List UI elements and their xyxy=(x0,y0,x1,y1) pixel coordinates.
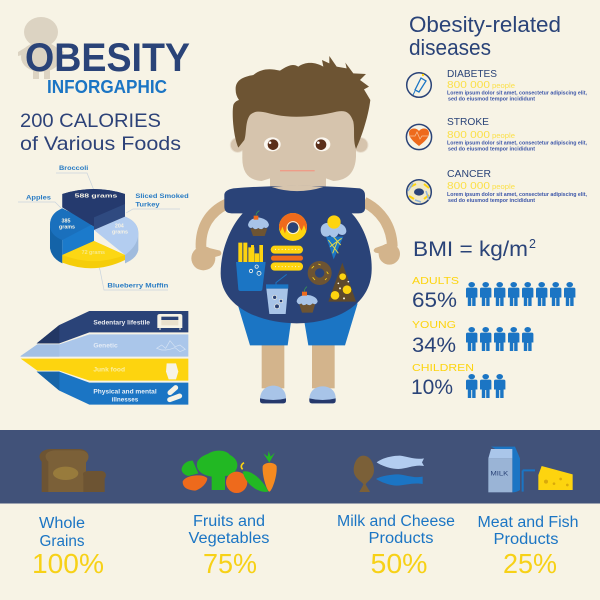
leader lines xyxy=(18,173,180,290)
arrow: genetic: Genetic xyxy=(93,344,118,350)
mouth xyxy=(280,169,315,173)
disease: diabetes: DIABETES xyxy=(447,69,497,80)
stat: children 10% xyxy=(411,362,505,399)
shirt xyxy=(221,186,372,323)
arrow: sedentary lifestyle: Sedentary lifestile xyxy=(93,321,151,327)
cucumber xyxy=(243,471,268,492)
arrow: physical and mental illnesses: Physical and mental xyxy=(93,389,157,395)
icon: milk and cheese xyxy=(488,447,573,492)
pie values and labels: 72 grams xyxy=(82,250,105,256)
arrow: sedentary lifestyle xyxy=(37,311,188,343)
disease: stroke: people xyxy=(492,133,515,140)
pie values and labels: Apples xyxy=(26,195,51,202)
label: meat and fish xyxy=(478,514,578,579)
pie values and labels: Blueberry Muffin xyxy=(107,282,168,289)
disease: diabetes: people xyxy=(492,83,515,90)
BMI formula: 2 xyxy=(529,237,536,251)
heading: obesity-related diseases: Obesity-related xyxy=(409,12,561,37)
disease: stroke: sed do eiusmod tempor incididunt xyxy=(448,146,535,152)
label: fruits and vegetables: 75% xyxy=(203,548,257,579)
label: whole grains: Whole xyxy=(39,515,85,532)
legs xyxy=(262,340,335,388)
disease: diabetes xyxy=(407,69,588,102)
heading: obesity-related diseases xyxy=(409,12,561,60)
pie values and labels: 385 xyxy=(62,219,70,225)
pie values and labels: Sliced Smoked xyxy=(135,193,189,200)
label: whole grains: Grains xyxy=(40,533,85,550)
stat: children 10%: CHILDREN xyxy=(412,362,474,374)
food: chocolate donut xyxy=(308,261,332,285)
disease: cancer: 800 000 xyxy=(447,180,490,192)
chicken leg xyxy=(354,456,374,492)
BMI formula: BMI = kg/m xyxy=(413,238,528,261)
disease: cancer xyxy=(407,169,588,204)
disease: cancer: CANCER xyxy=(447,169,491,180)
label: fruits and vegetables: Vegetables xyxy=(188,530,270,547)
arrow: physical and mental illnesses: illnesses xyxy=(112,397,139,403)
heading: calories xyxy=(20,110,181,155)
pie values and labels: Turkey xyxy=(135,202,160,209)
food: cupcake xyxy=(248,211,269,236)
arrow chart: causes of obesity xyxy=(21,311,188,405)
pie values and labels: 588 grams xyxy=(75,194,117,200)
body xyxy=(191,186,400,403)
disease: cancer: Lorem ipsum dolor sit amet, consectetur adipiscing elit, xyxy=(447,192,588,198)
slice: broccoli xyxy=(62,189,125,230)
straw xyxy=(523,470,535,492)
stat: young 34%: YOUNG xyxy=(412,319,456,331)
arrow: junk food: Junk food xyxy=(93,368,125,374)
stat: young 34% xyxy=(412,319,533,357)
broccoli xyxy=(197,451,237,490)
heading: calories: 200 CALORIES xyxy=(20,110,161,132)
arrow: junk food xyxy=(21,359,188,381)
disease: stroke xyxy=(406,117,588,152)
hair xyxy=(233,56,370,149)
food: ice cream xyxy=(321,215,346,259)
stat: adults 65% xyxy=(412,275,575,312)
disease: cancer: people xyxy=(492,184,515,191)
slice: sliced smoked turkey xyxy=(94,217,138,263)
disease: diabetes: 800 000 xyxy=(447,79,490,91)
label: whole grains xyxy=(32,515,104,579)
food: pizza slice xyxy=(328,263,356,302)
stat: adults 65%: ADULTS xyxy=(412,275,459,287)
pie chart: calories by food xyxy=(18,165,189,290)
arrow: genetic xyxy=(21,334,188,357)
shoes xyxy=(260,386,336,403)
curl xyxy=(241,463,244,469)
shorts xyxy=(238,303,358,345)
icon: fries box xyxy=(166,363,178,379)
icon: pills xyxy=(170,388,180,400)
label: whole grains: 100% xyxy=(32,548,104,579)
icon: heart xyxy=(406,124,432,150)
milk carton: MILK xyxy=(490,472,508,478)
label: fruits and vegetables: Fruits and xyxy=(193,513,265,530)
cheese xyxy=(538,466,573,490)
label: meat and fish: 25% xyxy=(503,548,557,579)
pie values and labels: 204 xyxy=(115,223,124,229)
food: french fries xyxy=(236,243,266,291)
arms xyxy=(201,202,392,248)
apple xyxy=(183,475,207,491)
icon: bread xyxy=(40,449,106,492)
heading: obesity-related diseases: diseases xyxy=(409,35,491,60)
slice: blueberry muffin xyxy=(62,241,125,268)
label: milk and cheese: Milk and Cheese xyxy=(337,513,455,530)
pie values and labels: Broccoli xyxy=(59,165,88,172)
hands xyxy=(191,243,400,270)
heading: calories: of Various Foods xyxy=(20,133,181,155)
icon: cell xyxy=(407,180,431,204)
fish top xyxy=(377,456,424,469)
label: meat and fish: Meat and Fish xyxy=(478,514,578,531)
fish bottom xyxy=(376,474,423,486)
disease: stroke: 800 000 xyxy=(447,129,490,141)
head xyxy=(230,56,370,193)
icon: vegetables xyxy=(182,451,277,493)
food: donut xyxy=(279,213,307,241)
subtitle: INFORGAPHIC xyxy=(47,77,167,97)
icon: chicken and fish xyxy=(354,456,424,492)
carrot xyxy=(263,463,277,492)
food: cupcake 2 xyxy=(297,287,318,313)
disease: cancer: sed do eiusmod tempor incididunt xyxy=(448,198,535,204)
ears xyxy=(230,138,368,152)
label: meat and fish: Products xyxy=(494,531,559,548)
stat: children 10%: 10% xyxy=(411,376,453,399)
label: milk and cheese: Products xyxy=(368,530,434,547)
label: milk and cheese xyxy=(337,513,455,579)
food: drink xyxy=(266,274,288,314)
slice: apples xyxy=(50,208,94,263)
tomato xyxy=(226,472,247,493)
icon: sofa xyxy=(157,314,182,330)
icon: syringe xyxy=(407,73,431,97)
pie values and labels: grams xyxy=(112,229,128,235)
food: burger xyxy=(271,246,303,271)
icon: dna xyxy=(157,341,185,352)
disease: diabetes: sed do eiusmod tempor incididunt xyxy=(448,96,535,102)
label: milk and cheese: 50% xyxy=(370,548,428,579)
pictogram: children xyxy=(466,374,505,398)
pictogram: young xyxy=(466,327,533,351)
pie values and labels xyxy=(26,165,189,289)
disease: stroke: Lorem ipsum dolor sit amet, consectetur adipiscing elit, xyxy=(447,140,588,146)
food band xyxy=(0,430,600,504)
pictogram: adults xyxy=(466,282,575,306)
neck overlap xyxy=(272,186,323,191)
arrow: physical and mental illnesses xyxy=(37,372,188,405)
leaf xyxy=(182,461,198,476)
disease: stroke: STROKE xyxy=(447,117,489,128)
boy character xyxy=(191,56,400,403)
pie values and labels: grams xyxy=(59,224,75,230)
eyes xyxy=(264,137,330,151)
label: fruits and vegetables xyxy=(188,513,270,579)
silhouette: boy behind title xyxy=(18,17,64,79)
stat: young 34%: 34% xyxy=(412,334,456,357)
disease: diabetes: Lorem ipsum dolor sit amet, consectetur adipiscing elit, xyxy=(447,90,588,96)
face xyxy=(242,107,356,193)
title: OBESITY xyxy=(25,36,190,80)
stat: adults 65%: 65% xyxy=(412,289,457,312)
